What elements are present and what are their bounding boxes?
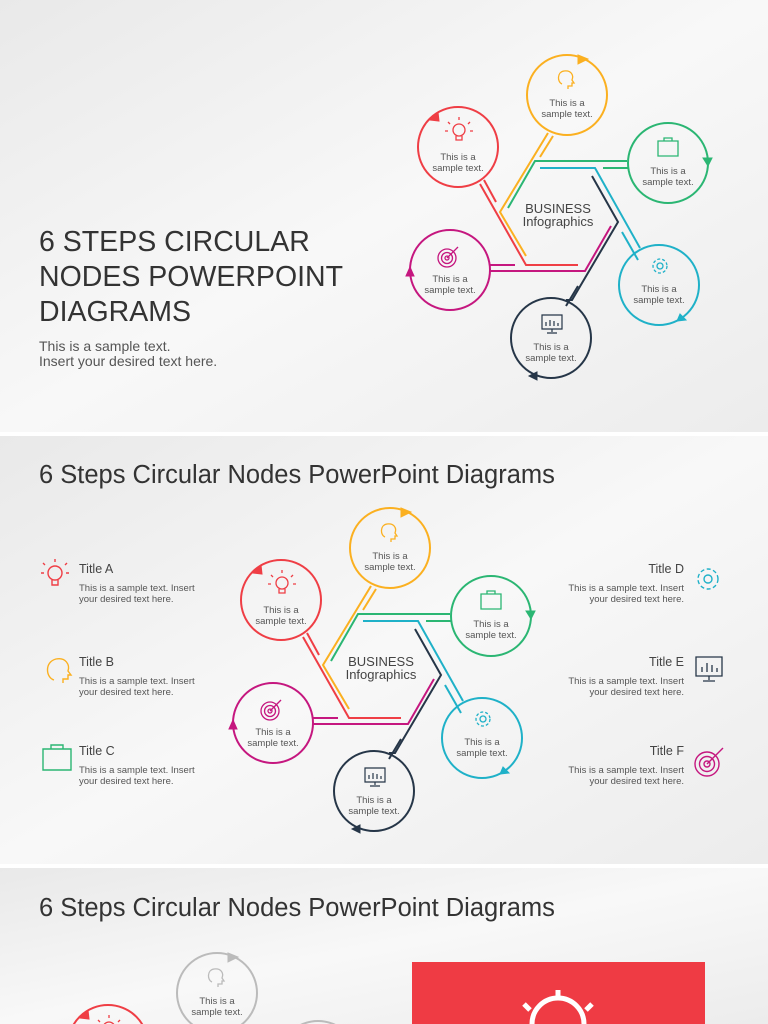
node yellow: sample text.	[541, 109, 593, 120]
icon bulb	[445, 117, 473, 140]
node yellow: This is a	[372, 551, 408, 562]
right list	[568, 562, 723, 787]
node yellow gray: sample text.	[191, 1007, 243, 1018]
node cyan: sample text.	[633, 295, 685, 306]
slide 1 title: 6 STEPS CIRCULAR	[39, 226, 310, 258]
item F	[568, 744, 723, 787]
diagram slide 3 (partial, gray)	[68, 953, 358, 1024]
node yellow gray	[177, 953, 257, 1024]
item B: Title B	[79, 655, 114, 669]
node dark: This is a	[356, 795, 392, 806]
diagram slide 1	[406, 55, 712, 380]
node green gray	[278, 1021, 358, 1024]
node yellow gray: This is a	[199, 996, 235, 1007]
item A: your desired text here.	[79, 594, 174, 605]
item E: your desired text here.	[589, 687, 684, 698]
item D	[568, 562, 718, 605]
slide 1 title: DIAGRAMS	[39, 296, 191, 328]
node yellow	[527, 55, 607, 135]
icon monitor	[542, 315, 562, 333]
item A	[41, 559, 195, 605]
connectors	[480, 133, 640, 306]
node red	[241, 560, 321, 640]
center label: Infographics	[346, 667, 417, 682]
node magenta: This is a	[255, 727, 291, 738]
item B: your desired text here.	[79, 687, 174, 698]
item E	[568, 655, 722, 698]
node green	[451, 576, 535, 656]
node yellow: sample text.	[364, 562, 416, 573]
node cyan	[442, 698, 522, 778]
node magenta: sample text.	[247, 738, 299, 749]
item D: your desired text here.	[589, 594, 684, 605]
node magenta	[406, 230, 490, 310]
icon gear	[653, 259, 667, 273]
item C	[43, 744, 195, 787]
item A: Title A	[79, 562, 114, 576]
item D: Title D	[648, 562, 684, 576]
icon briefcase	[658, 138, 678, 156]
item C: Title C	[79, 744, 115, 758]
red panel	[412, 962, 705, 1024]
slide 2 title: 6 Steps Circular Nodes PowerPoint Diagrams	[39, 461, 555, 489]
node red	[68, 1005, 148, 1024]
node red: sample text.	[432, 163, 484, 174]
node red: This is a	[440, 152, 476, 163]
slide 1 background	[0, 0, 768, 432]
node red	[418, 107, 498, 187]
item F: Title F	[650, 744, 684, 758]
slide 3 title: 6 Steps Circular Nodes PowerPoint Diagrams	[39, 894, 555, 922]
node dark	[334, 751, 414, 833]
node dark: sample text.	[348, 806, 400, 817]
node dark	[511, 298, 591, 380]
item C: your desired text here.	[79, 776, 174, 787]
item D: This is a sample text. Insert	[568, 583, 684, 594]
node cyan	[619, 245, 699, 325]
center label slide 1: BUSINESS	[525, 201, 591, 216]
center label slide 1: Infographics	[523, 214, 594, 229]
node dark: This is a	[533, 342, 569, 353]
diagram slide 2	[229, 508, 535, 833]
slide 1 subtitle: This is a sample text.	[39, 338, 170, 354]
node green: sample text.	[642, 177, 694, 188]
item B: This is a sample text. Insert	[79, 676, 195, 687]
center label: BUSINESS	[348, 654, 414, 669]
connectors	[303, 586, 463, 759]
node green	[628, 123, 712, 203]
node yellow	[350, 508, 430, 588]
item A: This is a sample text. Insert	[79, 583, 195, 594]
node cyan: This is a	[464, 737, 500, 748]
item F: your desired text here.	[589, 776, 684, 787]
icon bulb white	[524, 990, 592, 1024]
node dark: sample text.	[525, 353, 577, 364]
node red: sample text.	[255, 616, 307, 627]
left list	[41, 559, 195, 787]
center label	[346, 654, 417, 682]
item E: This is a sample text. Insert	[568, 676, 684, 687]
node yellow: This is a	[549, 98, 585, 109]
slide 2 background	[0, 436, 768, 864]
node green: This is a	[473, 619, 509, 630]
item F: This is a sample text. Insert	[568, 765, 684, 776]
slide 1 subtitle	[39, 338, 217, 369]
slide 1 title	[39, 226, 343, 328]
icon target	[438, 247, 458, 267]
slide 1 title: NODES POWERPOINT	[39, 261, 343, 293]
node cyan: This is a	[641, 284, 677, 295]
item B	[48, 655, 195, 698]
center label slide 1	[523, 201, 594, 229]
node cyan: sample text.	[456, 748, 508, 759]
node green: sample text.	[465, 630, 517, 641]
icon head	[558, 71, 574, 89]
node magenta: This is a	[432, 274, 468, 285]
item E: Title E	[649, 655, 684, 669]
node red: This is a	[263, 605, 299, 616]
slide 3 background	[0, 868, 768, 1024]
item C: This is a sample text. Insert	[79, 765, 195, 776]
node magenta	[229, 683, 313, 763]
node magenta: sample text.	[424, 285, 476, 296]
slide 1 subtitle: Insert your desired text here.	[39, 353, 217, 369]
node green: This is a	[650, 166, 686, 177]
